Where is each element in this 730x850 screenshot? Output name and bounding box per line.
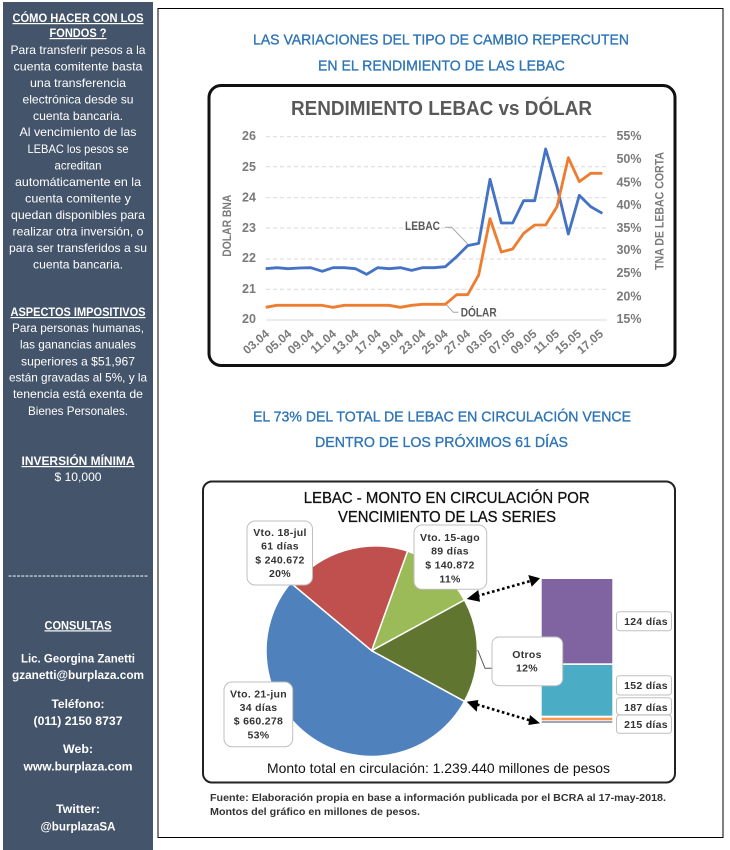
x axis labels: 27.04 [441,326,473,357]
text block: como hacer con los fondos: para ser transferidos a su [9,241,147,255]
callout: otros: 12% [516,663,538,675]
text block: como hacer con los fondos: Para transferir pesos a la [10,43,146,57]
callout: otros [492,637,563,686]
x axis labels [240,326,606,357]
text block: consultas: CONSULTAS [44,618,112,632]
divider text: --------------------------------- [8,568,148,582]
text block: como hacer con los fondos: cuenta comitente basta [14,60,143,74]
text block: como hacer con los fondos: quedan disponibles para [11,208,145,222]
text block: como hacer con los fondos: Al vencimiento de las [20,125,136,139]
heading: 73%: EL 73% DEL TOTAL DE LEBAC EN CIRCULACIÓN VENCE [253,408,631,426]
right axis labels: 15% [616,312,642,326]
panel: main frame [158,8,723,838]
label: 152 dias [616,676,672,695]
callout: 21-jun [224,682,293,747]
right axis labels: 35% [616,221,642,235]
callout: 18-jul: 61 días [261,541,299,553]
text block: como hacer con los fondos: CÓMO HACER CON LOS [12,10,144,25]
arrow: top [467,575,540,602]
left axis labels: 22 [242,251,256,265]
right axis labels: 40% [616,198,642,212]
arrow: bottom [467,700,540,725]
text block: aspectos impositivos: ASPECTOS IMPOSITIVOS [10,305,146,319]
x axis labels: 03.05 [463,326,495,357]
axis title left: DOLAR BNA [222,195,234,257]
source note: Montos del gráfico en millones de pesos. [210,806,420,818]
text block: como hacer con los fondos: LEBAC los pesos se [28,142,129,156]
right axis labels: 45% [616,176,642,190]
x axis labels: 19.04 [374,326,406,357]
chart title: RENDIMIENTO LEBAC vs DÓLAR [291,96,592,120]
x axis labels: 13.04 [329,326,362,357]
text block: como hacer con los fondos: automáticamente en la [15,175,141,189]
heading: tipo de cambio: LAS VARIACIONES DEL TIPO DE CAMBIO REPERCUTEN [253,32,629,48]
text block: aspectos impositivos [9,305,147,418]
callout: 15-ago: $ 140.872 [425,559,475,571]
x axis labels: 09.05 [508,326,540,357]
source note: Fuente: Elaboración propia en base a información publicada por el BCRA al 17-may-2018. [210,792,666,804]
stacked bar [542,579,612,723]
chart title: VENCIMIENTO DE LAS SERIES [338,509,556,526]
pie slices [266,546,477,756]
callout: 21-jun: Vto. 21-jun [230,688,287,700]
callout: 18-jul: 20% [269,568,291,580]
text block: aspectos impositivos: las ganancias anuales [20,338,136,352]
text block: consultas: @burplazaSA [40,820,116,834]
line: LEBAC [266,149,602,274]
right axis labels: 55% [616,129,642,143]
x axis labels: 11.05 [531,326,562,357]
panel: line chart rendimiento vs dolar [209,86,675,366]
heading: 73% [253,408,631,451]
text block: como hacer con los fondos [9,10,147,272]
series label: DOLAR: DÓLAR [461,306,497,320]
left axis labels: 24 [242,190,256,204]
x axis labels: 09.04 [285,326,317,357]
callout: 18-jul: Vto. 18-jul [253,527,307,539]
text block: consultas: Twitter: [56,802,100,816]
panel: pie chart [203,482,675,782]
right axis labels [616,129,642,326]
x axis labels: 15.05 [552,326,584,357]
label: 124 dias: 124 días [624,616,668,628]
text block: consultas: Web: [63,742,93,756]
text block: aspectos impositivos: Bienes Personales. [28,404,128,418]
label: 215 dias [616,715,672,733]
heading: 73%: DENTRO DE LOS PRÓXIMOS 61 DÍAS [315,434,568,451]
series label: LEBAC [405,221,468,244]
right axis labels: 25% [616,266,642,280]
callout: 15-ago: 89 días [431,546,469,558]
source note [210,792,666,818]
left axis labels: 21 [242,282,256,296]
callout: 21-jun: 53% [248,729,270,741]
line: DOLAR [266,158,602,307]
callout: 15-ago [414,525,487,589]
x axis labels: 07.05 [486,326,518,357]
text block: aspectos impositivos: Para personas humanas, [12,321,144,335]
text block: consultas: www.burplaza.com [22,760,132,774]
heading: tipo de cambio: EN EL RENDIMIENTO DE LAS LEBAC [318,58,565,74]
panel: sidebar [3,2,153,850]
axis title right: TNA DE LEBAC CORTA [654,152,666,270]
label: 152 dias: 152 días [624,680,668,692]
text block: consultas: gzanetti@burplaza.com [12,668,144,682]
x axis labels: 17.05 [574,326,606,357]
heading: tipo de cambio [253,32,629,74]
left axis labels: 26 [242,129,256,143]
callout: 15-ago: 11% [439,573,461,585]
text block: como hacer con los fondos: una transferencia [30,76,126,90]
x axis labels: 17.04 [352,326,384,357]
text block: inversion minima: INVERSIÓN MÍNIMA [22,453,135,468]
chart title: LEBAC - MONTO EN CIRCULACIÓN POR [304,488,590,507]
x axis labels: 23.04 [396,326,429,357]
text block: inversion minima: $ 10,000 [54,470,102,484]
label: 187 dias: 187 días [624,702,668,714]
left axis labels: 20 [242,312,256,326]
right axis labels: 50% [616,152,642,166]
text block: como hacer con los fondos: electrónica desde su [22,92,134,106]
text block: como hacer con los fondos: cuenta bancaria. [33,258,123,272]
text block: aspectos impositivos: superiores a $51,967 [21,354,135,368]
text block: consultas [12,618,144,834]
text block: inversion minima [22,453,135,484]
callout: 18-jul [247,521,312,585]
text block: aspectos impositivos: tenencia está exenta de [13,387,143,401]
text block: consultas: Teléfono: [52,697,104,711]
text block: consultas: (011) 2150 8737 [34,714,123,728]
series label: DOLAR [447,305,497,320]
leader line: otros [478,650,492,668]
x axis labels: 03.04 [240,326,272,357]
series label: LEBAC: LEBAC [405,221,440,233]
text block: aspectos impositivos: están gravadas al 5%, y la [9,371,147,385]
right axis labels: 30% [616,243,642,257]
text block: como hacer con los fondos: FONDOS ? [50,26,106,40]
text block: como hacer con los fondos: realizar otra inversión, o [12,224,144,238]
total text: Monto total en circulación: 1.239.440 millones de pesos [267,760,610,776]
text block: consultas: Lic. Georgina Zanetti [21,652,135,666]
x axis labels: 11.04 [308,326,339,357]
callout: otros: Otros [512,649,542,661]
label: 124 dias [616,612,672,631]
x axis labels: 25.04 [419,326,451,357]
chart title [304,488,590,526]
grid lines [266,137,607,289]
left axis labels [242,129,256,326]
text block: como hacer con los fondos: acreditan [54,158,102,172]
left axis labels: 25 [242,160,256,174]
right axis labels: 20% [616,290,642,304]
callout: 18-jul: $ 240.672 [255,554,305,566]
callout: 21-jun: $ 660.278 [234,716,283,728]
callout: 15-ago: Vto. 15-ago [420,532,480,544]
text block: como hacer con los fondos: cuenta comitente y [25,192,131,206]
callout: 21-jun: 34 días [240,702,277,714]
left axis labels: 23 [242,221,256,235]
x axis labels: 05.04 [262,326,295,357]
label: 215 dias: 215 días [624,719,668,731]
label: 187 dias [616,698,672,715]
text block: como hacer con los fondos: cuenta bancaria. [33,109,123,123]
